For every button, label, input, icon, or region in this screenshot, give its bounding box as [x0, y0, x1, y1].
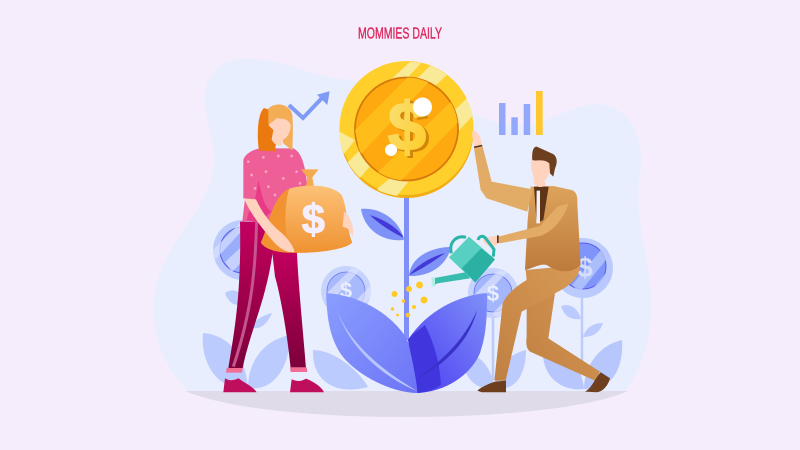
shirt and tie: [534, 187, 549, 223]
growth arrow icon: [289, 92, 329, 118]
large leaf left: [326, 293, 418, 393]
watering can: [432, 236, 495, 287]
arms: [244, 198, 353, 252]
face: [268, 118, 291, 146]
raised arm: [474, 147, 533, 212]
jacket: [525, 186, 581, 271]
woman: [223, 105, 353, 392]
shirt: [242, 148, 307, 227]
raised hand: [472, 130, 482, 148]
background plant: right-center coin: $: [487, 281, 499, 306]
shirt polka dots: [247, 155, 301, 196]
ground shadow: [185, 391, 628, 417]
front leg: [494, 265, 580, 381]
large coin: $: [391, 91, 429, 167]
plant small leaves: [361, 209, 451, 276]
infographic illustration: [154, 27, 651, 417]
neck and face: [531, 158, 550, 187]
large leaf right: [408, 293, 487, 393]
back leg: [526, 270, 600, 381]
money bag: $: [302, 195, 325, 242]
forward hand: [483, 236, 499, 247]
hair top: [268, 105, 293, 151]
background blob: [153, 59, 651, 392]
background plant: center-left coin: [313, 266, 372, 390]
bar chart icon: [499, 91, 543, 135]
background plant: center-left coin: $: [340, 278, 352, 303]
back leg and front leg: [228, 222, 306, 368]
title: MOMMIES DAILY: [358, 26, 442, 42]
money bag: [261, 169, 352, 253]
large coin: [339, 61, 474, 198]
main plant stem: [404, 190, 409, 340]
background plant: left coin: [203, 220, 290, 388]
background plant: right coin: [543, 238, 622, 389]
background plant: right coin: $: [577, 252, 593, 283]
hair ponytail: [258, 108, 280, 151]
shoes: [477, 372, 610, 392]
shoes: [223, 378, 324, 392]
forward arm: [498, 203, 568, 243]
hair: [532, 147, 557, 177]
large coin: $: [388, 89, 426, 165]
water drops: [391, 282, 428, 317]
man: [472, 130, 610, 392]
background plant: right-center coin: [462, 268, 526, 389]
cuffs: [226, 367, 307, 373]
